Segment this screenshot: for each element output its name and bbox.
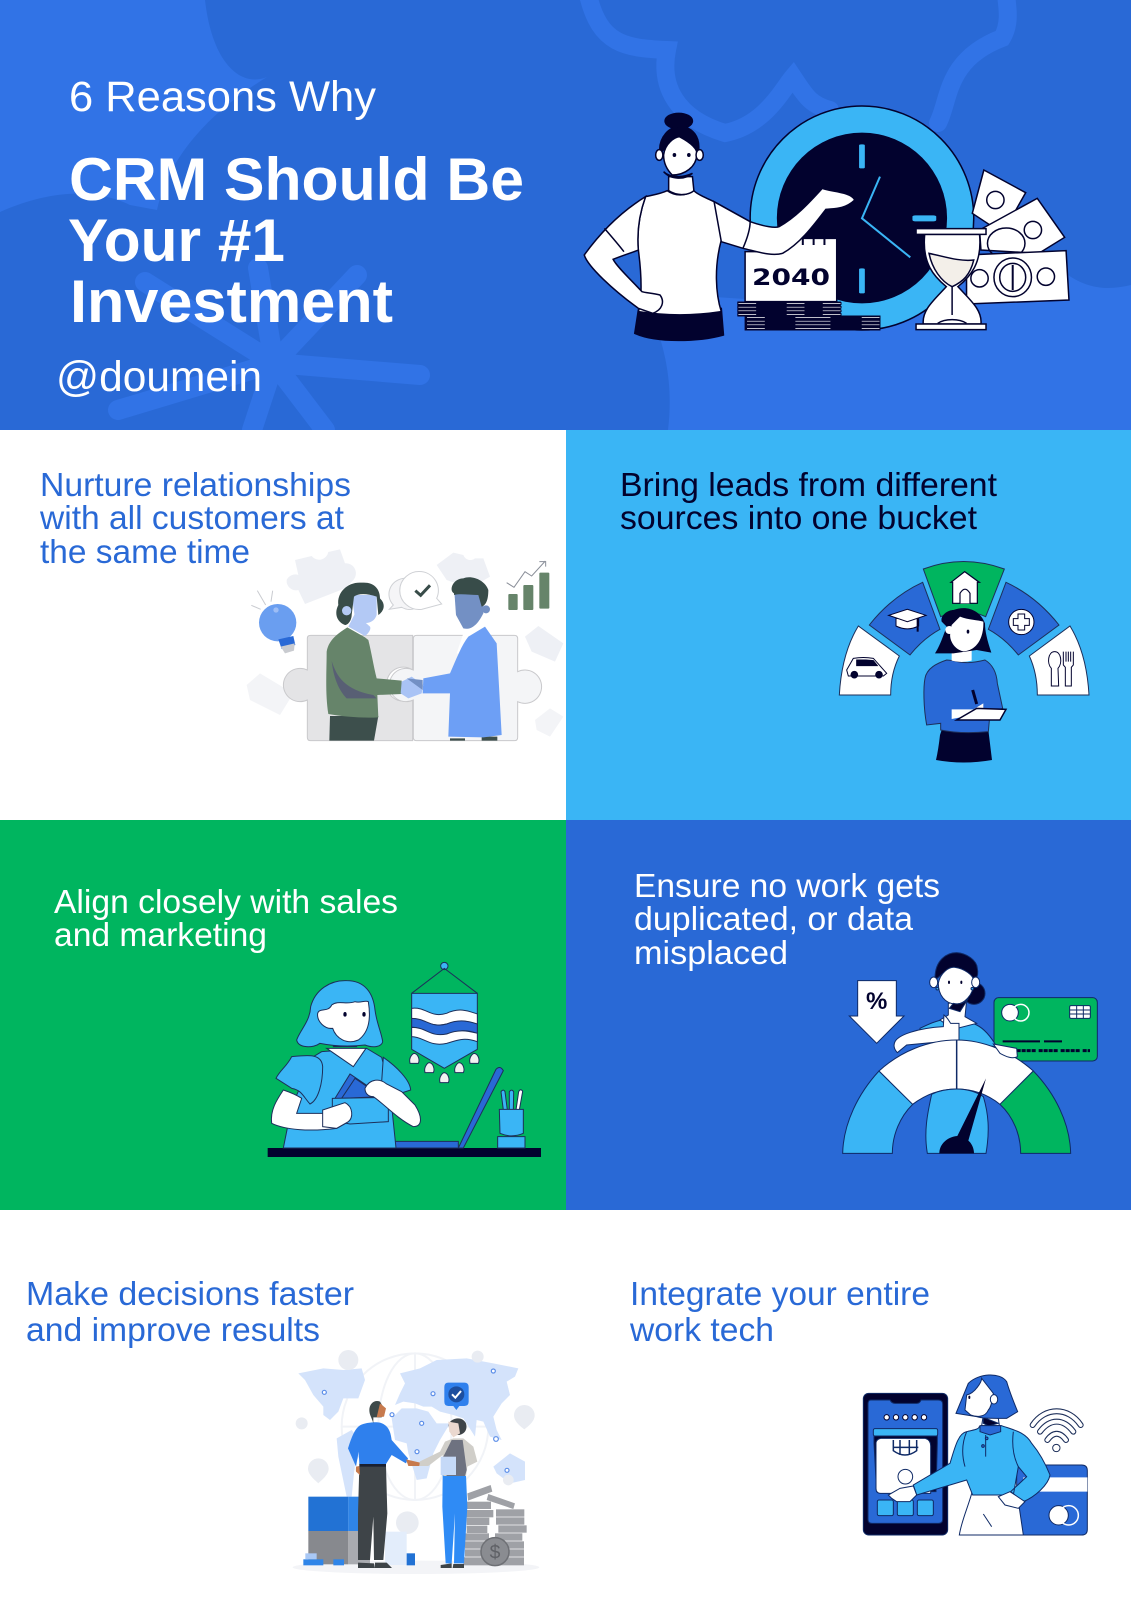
icon: hourglass bbox=[916, 229, 986, 330]
icon: calendar bbox=[745, 232, 837, 302]
text: make decisions faster bbox=[26, 1276, 354, 1349]
title: CRM Should Be Your #1 Investment bbox=[68, 146, 524, 335]
illustration: woman with clock, calendar, hourglass and money bbox=[584, 106, 1069, 340]
illustration: woman and lead sources fan bbox=[839, 561, 1089, 762]
papers on desk bbox=[302, 1138, 363, 1148]
handshake bbox=[401, 677, 423, 698]
ground shadow bbox=[293, 1561, 539, 1574]
illustration: woman with phone, card and wifi bbox=[863, 1375, 1087, 1535]
pennant bbox=[410, 962, 479, 1083]
figure: woman bbox=[888, 1375, 1050, 1535]
illustration: business handshake over world map bbox=[293, 1350, 539, 1574]
panel: align with sales bbox=[0, 820, 566, 1210]
title: CRM Should Be Your #1 Investment: Investment bbox=[70, 268, 393, 335]
panel: header bbox=[0, 0, 1131, 430]
text: bring leads: Bring leads from different bbox=[620, 466, 997, 503]
text: nurture relationships: the same time bbox=[40, 533, 250, 570]
figure: woman bbox=[924, 608, 1006, 762]
icon: coin stacks bbox=[738, 302, 880, 330]
credit card bbox=[1017, 1465, 1087, 1535]
text: bring leads bbox=[620, 466, 997, 536]
illustration: handshake on puzzle bbox=[247, 549, 563, 741]
icon: wifi bbox=[1033, 1411, 1081, 1452]
icon: money bills bbox=[967, 170, 1069, 304]
gauge bbox=[843, 1040, 1071, 1153]
icon: medical cross bbox=[1009, 609, 1034, 635]
icon: smartphone bbox=[863, 1393, 948, 1535]
icon: percent down arrow: % bbox=[866, 988, 887, 1015]
icon: percent down arrow bbox=[849, 981, 904, 1043]
lead segments bbox=[839, 561, 1089, 695]
text: nurture relationships: with all customers at bbox=[39, 499, 344, 536]
panel: integrate work tech bbox=[566, 1210, 1131, 1600]
icon: clock bbox=[750, 106, 974, 330]
title: CRM Should Be Your #1 Investment: Your #1 bbox=[68, 207, 285, 274]
icon: light bulb bbox=[251, 591, 296, 653]
illustration: woman at desk with wallet and pennant bbox=[268, 962, 541, 1157]
text: make decisions faster: and improve results bbox=[26, 1312, 320, 1349]
man bbox=[348, 1401, 420, 1568]
coin stacks bbox=[463, 1485, 527, 1565]
man with green sweater bbox=[326, 583, 402, 741]
world map bbox=[298, 1358, 525, 1497]
hand on gauge bbox=[993, 1044, 1017, 1058]
illustration: business handshake over world map: $ bbox=[490, 1542, 501, 1563]
pencil cup bbox=[498, 1090, 525, 1148]
heading: 6 Reasons Why: 6 Reasons Why bbox=[69, 73, 376, 121]
man with blue jacket bbox=[423, 577, 502, 741]
desk bbox=[268, 1148, 541, 1157]
figure: woman bbox=[584, 113, 855, 340]
figure: woman bbox=[894, 953, 997, 1053]
gauge needle bbox=[939, 1078, 986, 1153]
text: nurture relationships bbox=[39, 466, 351, 570]
woman bbox=[419, 1418, 477, 1568]
panel: make decisions faster bbox=[0, 1210, 566, 1600]
figure: woman bbox=[271, 981, 420, 1148]
puzzle pieces bbox=[283, 635, 542, 741]
text: integrate work tech: work tech bbox=[629, 1312, 774, 1349]
text: ensure no duplicated work: misplaced bbox=[634, 934, 788, 971]
icon: graduation cap bbox=[889, 609, 926, 632]
wallet and banknotes bbox=[332, 1074, 388, 1124]
check pin bbox=[444, 1383, 469, 1410]
credit card bbox=[994, 998, 1097, 1061]
laptop bbox=[372, 1067, 503, 1148]
text: align with sales: and marketing bbox=[54, 916, 267, 953]
bar chart bbox=[507, 561, 549, 610]
text: nurture relationships: Nurture relationships bbox=[40, 466, 351, 503]
text: integrate work tech: Integrate your entire bbox=[630, 1276, 930, 1313]
text: ensure no duplicated work: duplicated, or data bbox=[634, 900, 914, 937]
illustration: woman with gauge and card bbox=[843, 953, 1097, 1153]
text: make decisions faster: Make decisions faster bbox=[26, 1276, 354, 1313]
handle: @doumein: @doumein bbox=[56, 353, 262, 401]
icon: spoon and fork bbox=[1049, 652, 1073, 686]
panel: nurture relationships bbox=[0, 430, 566, 820]
text: ensure no duplicated work: Ensure no work gets bbox=[634, 867, 940, 904]
globe lines bbox=[342, 1353, 488, 1500]
boxes and papers bbox=[303, 1497, 415, 1565]
illustration: woman with clock, calendar, hourglass and money: 2040 bbox=[752, 266, 830, 291]
panel: ensure no work duplicated bbox=[566, 820, 1131, 1210]
text: align with sales bbox=[54, 883, 398, 953]
text: bring leads: sources into one bucket bbox=[620, 499, 977, 536]
text: integrate work tech bbox=[629, 1276, 930, 1349]
text: align with sales: Align closely with sales bbox=[54, 883, 398, 920]
title: CRM Should Be Your #1 Investment: CRM Should Be bbox=[69, 146, 524, 213]
text: ensure no duplicated work bbox=[634, 867, 940, 971]
icon: car bbox=[847, 657, 887, 678]
panel: bring leads bbox=[566, 430, 1131, 820]
speech bubbles bbox=[389, 571, 442, 609]
icon: house bbox=[951, 572, 979, 603]
